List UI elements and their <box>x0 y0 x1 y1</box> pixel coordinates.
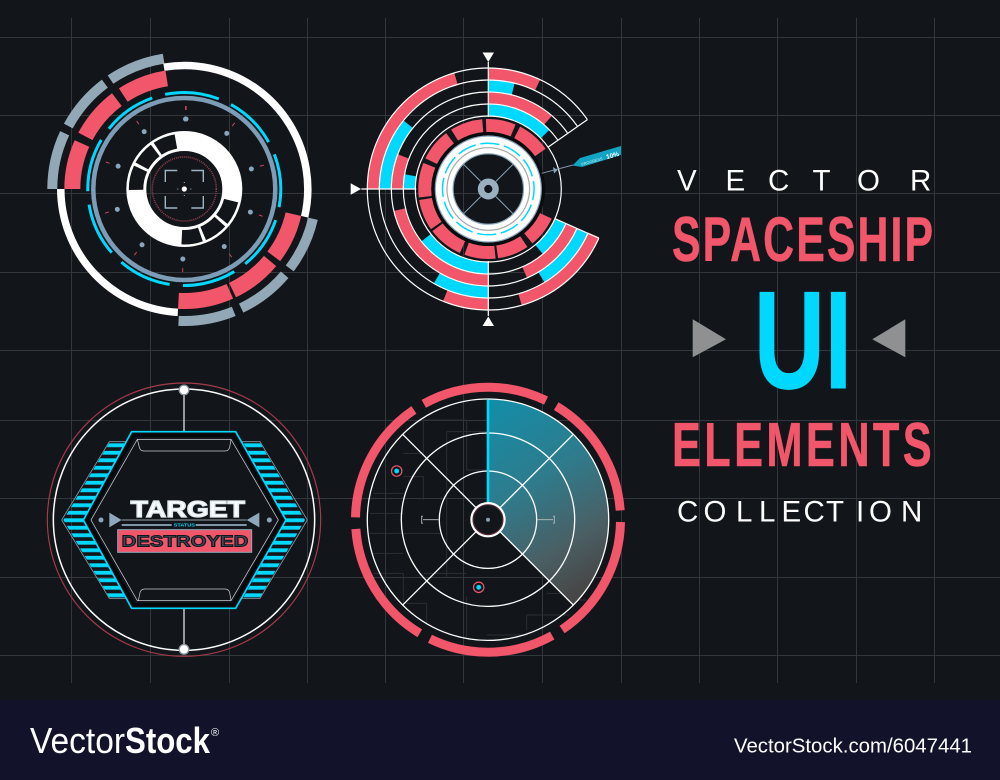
radar blip lower <box>474 582 484 592</box>
footer band <box>0 700 1000 780</box>
outer red circle <box>47 383 321 656</box>
radar blip upper left <box>392 466 402 476</box>
destroyed badge: DESTROYED <box>122 534 248 551</box>
progress callout <box>542 146 621 174</box>
range brackets <box>422 516 554 523</box>
cyan sweep line <box>487 400 489 504</box>
callout text: 10% <box>605 151 620 161</box>
bottom bracket <box>138 589 231 601</box>
red arc segments <box>27 31 342 347</box>
top node <box>179 385 189 395</box>
heading: collection: COLLECTION <box>677 496 922 528</box>
blue-grey ring <box>93 98 275 280</box>
radar hub <box>471 503 505 536</box>
top bracket <box>137 439 231 451</box>
white circle <box>53 389 315 650</box>
cyan dashed ring <box>71 76 297 302</box>
sweep sector <box>488 399 609 605</box>
destroyed badge <box>118 530 252 552</box>
footer logo: Stock <box>125 720 211 761</box>
target text: TARGET <box>131 496 245 522</box>
arrow: left pointer <box>693 319 726 357</box>
pointer arrows and rule <box>109 513 259 527</box>
callout text: PROGRESS <box>581 156 603 167</box>
callout text <box>580 151 620 168</box>
heading: elements: ELEMENTS <box>672 412 932 480</box>
targeting brackets <box>165 170 203 208</box>
faint circuit lines <box>370 420 608 637</box>
callout leader arrow <box>542 165 573 174</box>
third red band <box>368 69 608 309</box>
white donut <box>136 141 232 237</box>
white glowing ring <box>430 130 547 248</box>
status label: STATUS <box>174 523 195 528</box>
heading: spaceship: SPACESHIP <box>672 205 933 275</box>
fourth cyan band <box>384 85 593 293</box>
centre dot <box>177 182 191 196</box>
panel: radar <box>353 385 623 654</box>
red tick marks <box>102 107 267 271</box>
icon: top triangle <box>482 52 494 62</box>
footer id: VectorStock.com/6047441 <box>734 736 972 758</box>
heading: UI: UI <box>754 263 852 418</box>
outer red band <box>337 38 640 340</box>
donut windows <box>116 121 252 257</box>
white ring outlines <box>329 29 648 349</box>
right striped chevron <box>242 442 307 598</box>
red segmented outer ring <box>353 385 623 654</box>
side dots <box>98 517 272 522</box>
callout tag <box>572 146 621 167</box>
vertical connectors <box>182 393 186 647</box>
cyan hexagon <box>83 432 286 608</box>
inner thin hexagon <box>91 439 278 601</box>
footer logo <box>30 720 219 761</box>
second cyan band <box>352 53 624 325</box>
grey dots ring <box>113 117 256 261</box>
icon: bottom triangle <box>482 316 494 326</box>
central hub <box>481 182 496 196</box>
left striped chevron <box>62 442 128 598</box>
segmented red cells <box>400 101 577 277</box>
heading: vector: VECTOR <box>677 164 931 198</box>
panel: concentric HUD dial <box>0 3 370 375</box>
panel: target status hexagon <box>47 383 321 656</box>
panel: progress wheel <box>329 29 648 349</box>
footer logo: ® <box>211 727 219 739</box>
hub spokes <box>464 164 513 214</box>
bottom node <box>179 644 189 654</box>
white outer ring arcs <box>42 47 326 331</box>
arrow: right pointer <box>872 319 905 357</box>
footer logo: Vector <box>30 720 125 761</box>
icon: left triangle <box>351 183 361 195</box>
range rings and spokes <box>367 399 609 640</box>
outer grey arc segments <box>0 3 370 375</box>
dotted red circle <box>152 157 216 221</box>
